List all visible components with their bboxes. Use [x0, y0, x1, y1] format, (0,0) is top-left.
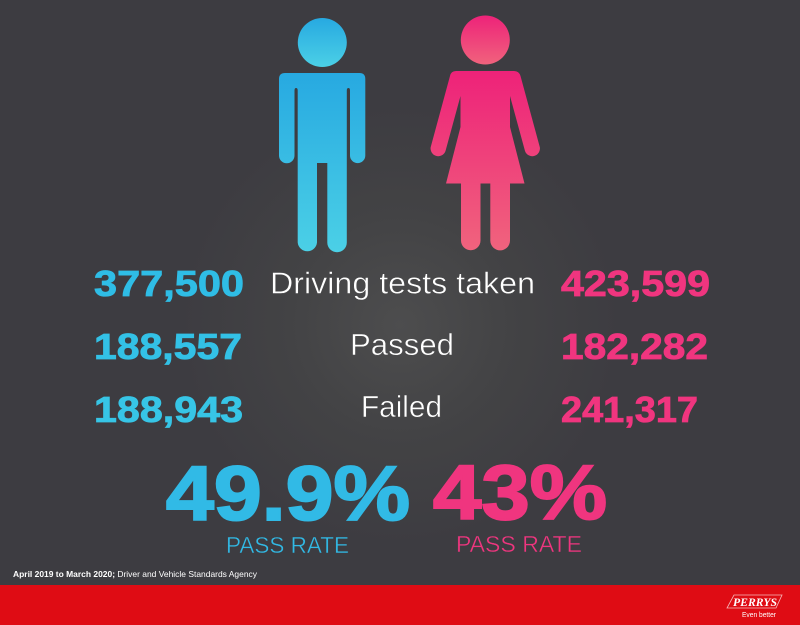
stat: female pass rate: PASS RATE [456, 531, 582, 557]
icon: man figure [279, 18, 365, 252]
stat: female pass rate: 43% [433, 450, 607, 536]
footer band [0, 585, 800, 625]
logo: Perrys: PERRYS [733, 595, 777, 609]
stat: male pass rate: PASS RATE [226, 532, 349, 558]
logo: Perrys: Even better [742, 612, 777, 619]
row: failed: Failed [361, 389, 442, 424]
row: passed: 182,282 [561, 326, 708, 367]
row: failed [94, 389, 698, 430]
row: driving tests taken [94, 263, 710, 304]
row: driving tests taken: Driving tests taken [270, 266, 535, 300]
row: passed [94, 326, 708, 367]
row: passed: 188,557 [94, 326, 242, 367]
source note: April 2019 to March 2020; Driver and Vehicle Standards Agency [13, 569, 258, 579]
row: failed: 188,943 [94, 389, 243, 430]
row: driving tests taken: 377,500 [94, 263, 244, 304]
row: passed: Passed [350, 327, 454, 362]
row: failed: 241,317 [561, 389, 698, 430]
stat: male pass rate: 49.9% [166, 451, 410, 537]
row: driving tests taken: 423,599 [561, 263, 710, 304]
logo: Perrys [727, 595, 782, 619]
icon: woman figure [431, 16, 540, 250]
